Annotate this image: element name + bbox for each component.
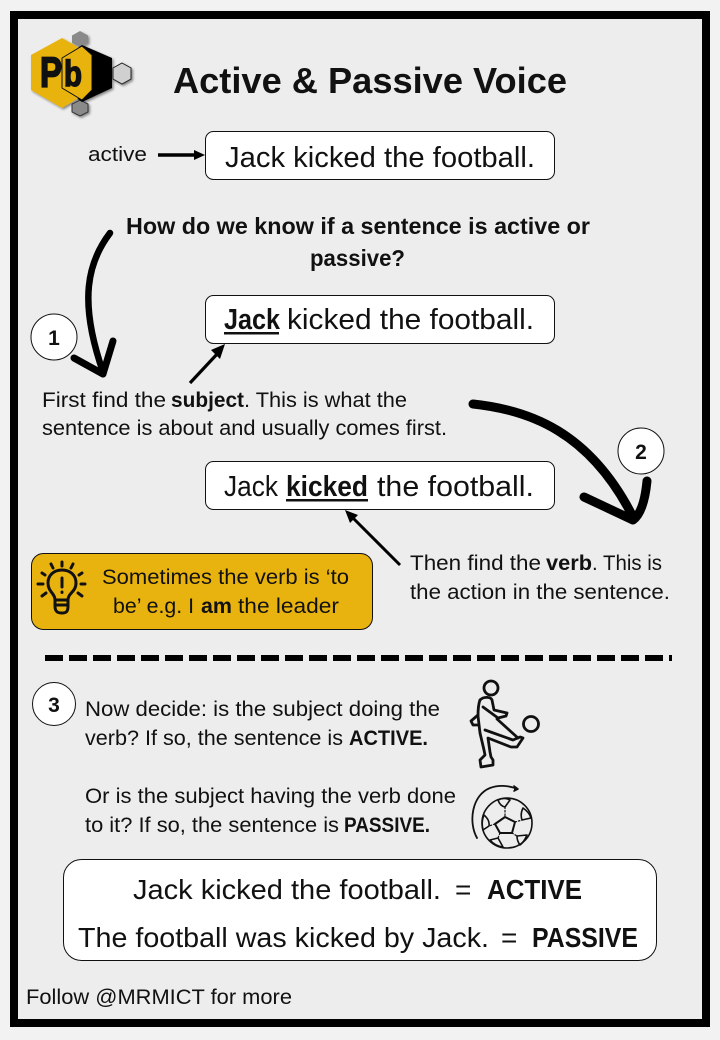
sentence box 1: Jack kicked the football. [225, 142, 535, 174]
text: find the subject: sentence is about and usually comes first. [42, 417, 447, 440]
tip panel: be’ e.g. I [113, 595, 194, 618]
heading question: passive? [310, 245, 405, 271]
arrow: active to sentence [158, 150, 205, 160]
summary panel: PASSIVE [532, 922, 638, 953]
sentence box 3: verb: the football. [377, 471, 534, 503]
icon: light bulb [38, 562, 85, 613]
summary panel: ACTIVE [487, 874, 582, 905]
sentence box 2: subject [206, 296, 554, 344]
sentence box 3: verb: Jack [224, 471, 278, 503]
text: find the verb: the action in the sentence. [410, 581, 670, 604]
step 2 badge: 2 [635, 441, 647, 464]
summary panel: The football was kicked by Jack. [78, 922, 489, 953]
text: active test: Now decide: is the subject doing the [85, 698, 440, 721]
tip panel: the leader [238, 595, 339, 618]
text: passive test [85, 785, 456, 837]
summary panel: = [455, 874, 471, 905]
step 3 badge [32, 682, 76, 726]
text: find the verb: . This is [592, 552, 662, 575]
summary panel: = [501, 922, 517, 953]
step 1 badge [31, 314, 77, 360]
logo: Pb hexagons: b [64, 53, 82, 94]
sentence box 1 [206, 132, 554, 180]
logo: Pb hexagons: P [40, 49, 62, 97]
sentence box 2: subject: kicked the football. [287, 304, 534, 336]
step 2 badge [618, 428, 664, 474]
text: active test: verb? If so, the sentence is [85, 727, 343, 750]
tip panel [32, 554, 372, 630]
label: active: active [88, 144, 147, 166]
curved arrow 2 [473, 404, 647, 520]
sentence box 2: subject: Jack [224, 304, 281, 336]
text: find the subject: subject [171, 389, 244, 412]
tip panel: Sometimes the verb is ‘to [102, 566, 349, 589]
heading question [126, 213, 590, 271]
tip panel: am [201, 595, 232, 618]
text: find the subject [42, 389, 447, 440]
footer credit: Follow @MRMICT for more [26, 986, 292, 1009]
text: passive test: to it? If so, the sentence is [85, 814, 339, 837]
step 1 badge: 1 [48, 327, 60, 350]
text: find the subject: . This is what the [244, 389, 407, 412]
arrow: to verb [345, 510, 400, 565]
text: find the verb [410, 552, 670, 604]
text: passive test: PASSIVE. [344, 814, 430, 837]
text: find the verb: verb [546, 552, 592, 575]
summary panel [64, 860, 656, 960]
step 3 badge: 3 [48, 694, 60, 717]
icon: football [472, 786, 532, 848]
heading question: How do we know if a sentence is active or [126, 213, 590, 239]
icon: person kicking ball [471, 681, 538, 767]
logo: Pb hexagons [31, 31, 131, 116]
text: active test: ACTIVE. [349, 727, 428, 750]
text: find the subject: First find the [42, 389, 166, 412]
text: active test [85, 698, 440, 750]
summary panel: Jack kicked the football. [133, 874, 441, 905]
text: passive test: Or is the subject having the verb done [85, 785, 456, 808]
sentence box 3: verb: kicked [286, 471, 368, 503]
title: Active & Passive Voice [173, 60, 567, 101]
text: find the verb: Then find the [410, 552, 541, 575]
arrow: to subject [190, 344, 225, 383]
curved arrow 1 [74, 233, 113, 374]
sentence box 3: verb [206, 462, 554, 510]
